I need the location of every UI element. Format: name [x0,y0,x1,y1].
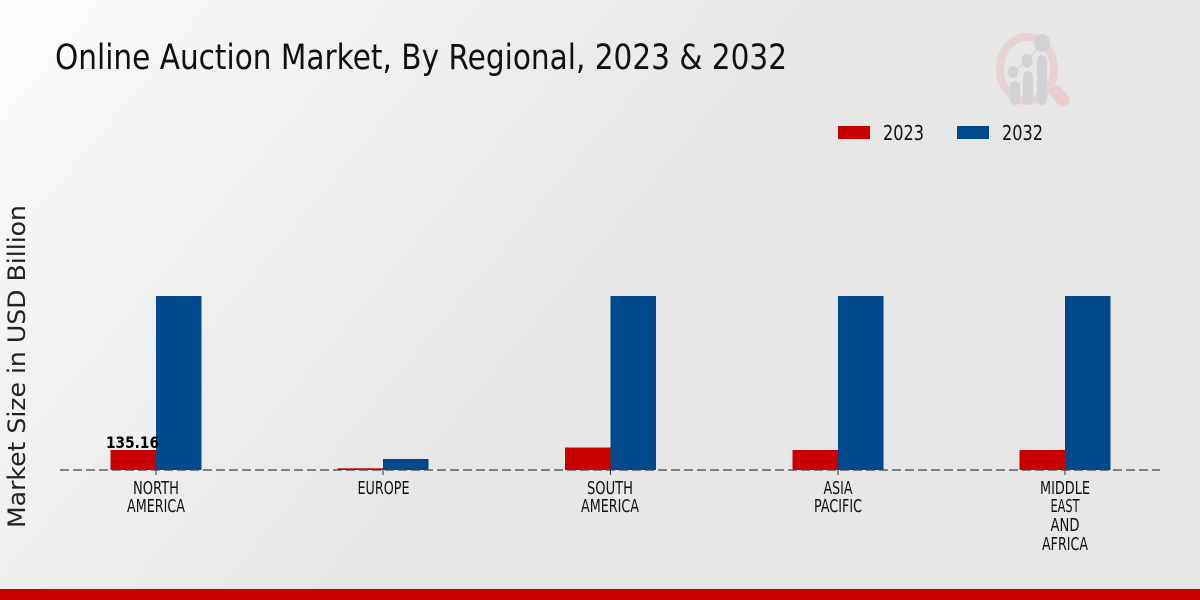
legend item: 2032 [957,121,1043,145]
label: Middle East and Africa: MIDDLE [1040,479,1090,499]
legend item: 2023 [838,121,924,145]
legend item: 2032: 2032 [1002,121,1043,145]
label: Europe: EUROPE [358,479,410,499]
label: South America: AMERICA [581,497,639,517]
label: Asia Pacific: PACIFIC [814,497,862,517]
baseline [60,469,1160,471]
label: Middle East and Africa: AND [1050,516,1080,536]
bars: Asia Pacific [792,296,884,470]
legend [838,121,1043,145]
category labels [127,479,1090,555]
bars: South America [565,296,656,470]
label: Middle East and Africa: EAST [1050,497,1080,517]
label: North America: NORTH [133,479,179,499]
bars: Middle East and Africa [1020,296,1110,470]
tick marks [156,470,1065,475]
y-axis title: Market Size in USD Billion [3,205,31,528]
title: Online Auction Market, By Regional, 2023 & 2032 [55,38,787,78]
legend item: 2023: 2023 [883,121,924,145]
label: Middle East and Africa: AFRICA [1042,535,1088,555]
label: South America: SOUTH [587,479,633,499]
bar chart [60,296,1160,475]
footer bar [0,589,1200,600]
bars: Europe [338,459,428,470]
label: Asia Pacific: ASIA [824,479,853,499]
icon: watermark logo [1000,34,1063,105]
label: North America: AMERICA [127,497,185,517]
bars: North America [110,296,202,470]
data label: 135.16 [106,433,159,452]
